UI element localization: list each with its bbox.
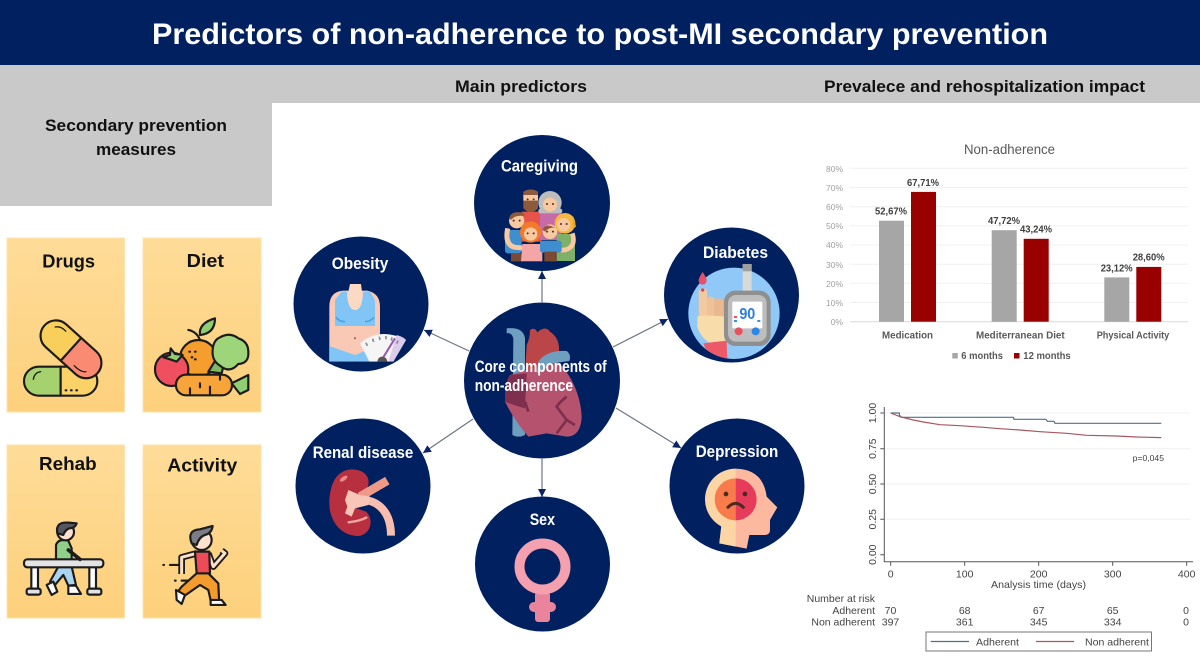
bars: mediterranean diet: 47,72% (988, 215, 1021, 227)
predictor: depression: Depression (696, 443, 778, 461)
text: core components of non-adherence: non-adherence (475, 377, 573, 395)
number at risk table: 70 (885, 605, 896, 617)
icon: anatomical heart (505, 328, 582, 437)
survival chart: rehospitalization: 0.00 (867, 544, 879, 565)
predictor: obesity: Obesity (332, 255, 389, 273)
panel: rehab card: Rehab (39, 453, 97, 474)
panel: activity card (143, 445, 261, 618)
bars: medication: 52,67% (875, 206, 908, 218)
bar chart: non-adherence: 50% (826, 221, 843, 231)
survival chart legend: Adherent (976, 636, 1019, 648)
bar chart: non-adherence: 70% (826, 183, 843, 193)
predictor: sex: Sex (530, 511, 556, 529)
number at risk table: 334 (1104, 617, 1122, 629)
chart title: Non-adherence (964, 142, 1055, 157)
heading: secondary prevention measures: Secondary prevention (45, 116, 227, 135)
predictor: diabetes: Diabetes (703, 244, 768, 262)
predictor: caregiving: Caregiving (501, 158, 578, 176)
number at risk table: 345 (1030, 617, 1048, 629)
survival chart: rehospitalization: 1.00 (867, 403, 879, 423)
predictor: diabetes (664, 228, 799, 362)
survival chart: rehospitalization: 100 (956, 569, 974, 581)
bars: mediterranean diet: 43,24% (1020, 224, 1053, 236)
number at risk table: 397 (882, 617, 899, 629)
predictor: sex (475, 496, 610, 632)
bar chart: non-adherence: 20% (826, 279, 843, 289)
predictor: caregiving (474, 135, 610, 271)
arrows from core to predictors (423, 271, 681, 497)
section header band (0, 65, 1200, 206)
chart legend: 12 months (1023, 350, 1071, 362)
icon: female symbol (520, 544, 566, 622)
bar chart: non-adherence: 60% (826, 202, 843, 212)
number at risk table: 67 (1033, 605, 1045, 617)
survival chart: rehospitalization: Analysis time (days) (991, 579, 1086, 591)
survival chart: rehospitalization: 400 (1178, 569, 1196, 581)
survival chart: rehospitalization: 0.25 (867, 509, 879, 530)
number at risk table: 0 (1183, 605, 1189, 617)
bar chart: non-adherence: 80% (826, 164, 843, 174)
icon: torso and weighing scale (329, 284, 406, 367)
predictor: renal disease: Renal disease (313, 444, 413, 462)
bars: mediterranean diet: Mediterranean Diet (976, 330, 1065, 342)
icon: kidney (329, 469, 391, 536)
heading: secondary prevention measures (45, 116, 227, 159)
panel: rehab card (7, 445, 124, 618)
bar chart: non-adherence (826, 142, 1188, 362)
bar chart: non-adherence: 40% (826, 240, 843, 250)
survival chart: rehospitalization: 0.75 (867, 438, 879, 459)
bars: medication (875, 177, 940, 342)
number at risk table: Non adherent (811, 617, 875, 629)
icon: fruit and vegetables (155, 318, 248, 395)
panel: drugs card: Drugs (42, 250, 95, 271)
bars: physical activity (1097, 252, 1169, 342)
title: Predictors of non-adherence to post-MI secondary prevention (152, 18, 1048, 51)
survival chart: rehospitalization: 0 (888, 569, 894, 581)
number at risk table: 0 (1183, 617, 1189, 629)
bar chart: non-adherence: 10% (826, 298, 843, 308)
number at risk table: 65 (1107, 605, 1119, 617)
survival chart legend: Non adherent (1085, 636, 1149, 648)
panel: diet card (143, 238, 261, 412)
number at risk table: Number at risk (807, 593, 876, 605)
curve: non adherent (891, 413, 1161, 438)
heading: prevalence and rehospitalization impact: Prevalece and rehospitalization impact (824, 77, 1145, 96)
curve: adherent (891, 413, 1161, 423)
survival chart: rehospitalization: 300 (1104, 569, 1122, 581)
predictor: depression (670, 418, 804, 554)
header banner (0, 0, 1200, 65)
icon: runner (163, 526, 226, 605)
panel: drugs card (7, 238, 124, 412)
heading: main predictors: Main predictors (455, 77, 587, 96)
bar chart: non-adherence: 30% (826, 260, 843, 270)
bars: medication: Medication (882, 330, 933, 342)
icon: patient walking between parallel bars (24, 523, 103, 595)
number at risk table (807, 593, 1189, 629)
core components circle (464, 302, 620, 458)
chart legend: 6 months (961, 350, 1003, 362)
icon: family (505, 189, 576, 262)
number at risk table: 68 (959, 605, 971, 617)
heading: secondary prevention measures: measures (96, 140, 176, 159)
bars: physical activity: 28,60% (1133, 252, 1165, 264)
survival chart legend (926, 632, 1152, 651)
bars: physical activity: 23,12% (1101, 262, 1133, 274)
predictor: obesity (294, 236, 428, 372)
icon: sad face in head (705, 469, 777, 549)
text: core components of non-adherence: Core components of (475, 358, 607, 376)
bar chart: non-adherence: 0% (831, 317, 843, 327)
number at risk table: Adherent (832, 605, 875, 617)
survival chart: rehospitalization: p=0,045 (1133, 453, 1164, 463)
predictor: renal disease (296, 418, 430, 554)
bars: physical activity: Physical Activity (1097, 330, 1169, 342)
icon: glucose meter and finger: 90 (739, 306, 755, 323)
survival chart: rehospitalization: 200 (1030, 569, 1048, 581)
icon: pills (24, 314, 108, 396)
survival chart: rehospitalization: 0.50 (867, 474, 879, 494)
number at risk table: 361 (956, 617, 974, 629)
text: core components of non-adherence (475, 358, 607, 395)
bars: medication: 67,71% (907, 177, 940, 189)
chart legend (952, 350, 1071, 362)
bars: mediterranean diet (976, 215, 1065, 342)
panel: activity card: Activity (167, 455, 238, 476)
panel: diet card: Diet (187, 250, 224, 271)
survival chart: rehospitalization (807, 403, 1196, 651)
